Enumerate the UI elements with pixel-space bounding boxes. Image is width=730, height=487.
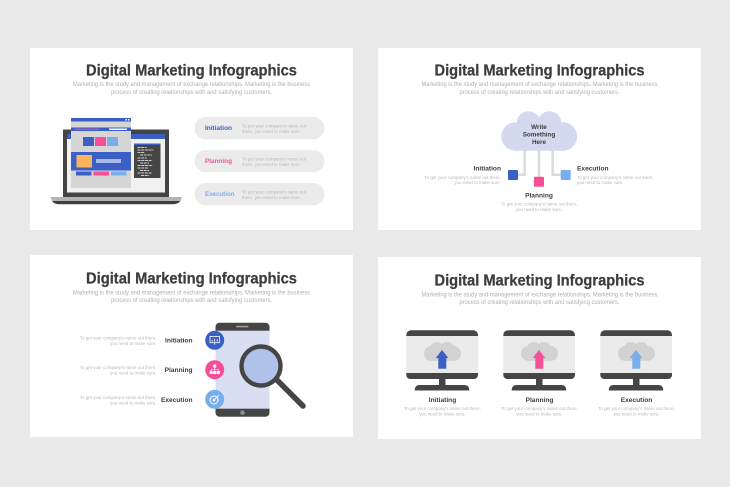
text block: execution row: Execution [161,397,192,404]
label: monitor 3: you need to make sure. [613,412,660,417]
label: monitor 1: Initiating [429,397,456,404]
icon: execution target badge [205,390,224,409]
text block: initiation row [80,335,192,346]
text block: monitors slide intro [422,291,658,306]
text block: execution: you need to make sure. [577,180,623,185]
pill: planning: To get your company's name out [242,156,307,161]
icon: cloud: Here [532,139,546,146]
icon: cloud: Write [531,124,547,131]
pill: initiation: there, you need to make sure. [242,129,301,134]
label: monitor 1: To get your company's name out there, [404,406,481,411]
text block: laptop slide intro: Marketing is the study and management of exchange relationships. Marketing is the business [73,81,310,88]
connector lines [518,150,561,177]
pill: execution: there, you need to make sure. [242,195,301,200]
label: monitor 2: To get your company's name out there, [501,406,578,411]
marker: execution square [561,170,571,180]
text block: execution: Execution [577,166,609,173]
pill: execution: Execution [205,191,234,198]
text block: monitors slide intro: process of creating relationships with and satisfying customers. [460,299,620,306]
text block: planning: you need to make sure. [516,207,562,212]
text block: cloud slide intro: process of creating relationships with and satisfying customers. [460,89,620,96]
panel: cloud slide [378,48,701,230]
heading: phone slide title: Digital Marketing Infographics [86,270,297,287]
text block: planning row: you need to make sure. [110,371,156,376]
text block: laptop slide intro: process of creating relationships with and satisfying customers. [111,89,272,96]
icon: cloud [501,111,577,151]
illustration: phone [216,323,270,417]
text block: planning row [80,365,192,376]
text block: cloud slide intro [422,81,658,96]
text block: laptop slide intro [73,81,310,96]
text block: planning row: Planning [165,367,192,374]
text block: initiation row: To get your company's name out there, [80,335,156,340]
icon: planning hierarchy badge [205,360,224,379]
text block: phone slide intro: Marketing is the study and management of exchange relationships. Marketing is the business [73,289,310,296]
illustration: monitor 1 [406,330,478,390]
pill: initiation: To get your company's name out [242,123,307,128]
heading: monitors slide title: Digital Marketing Infographics [434,272,644,289]
heading: cloud slide title: Digital Marketing Infographics [434,62,644,79]
illustration: monitor 2 [503,330,575,390]
label: monitor 1: you need to make sure. [419,412,466,417]
text block: execution [577,166,654,185]
label: monitor 3: To get your company's name out there, [598,406,675,411]
text block: cloud slide intro: Marketing is the study and management of exchange relationships. Marketing is the business [422,81,658,88]
heading: laptop slide title: Digital Marketing Infographics [86,62,297,79]
label: monitor 2: Planning [526,397,553,404]
pill: initiation [194,117,324,139]
icon: initiation chart badge [205,331,224,350]
text block: initiation: Initiation [474,166,501,173]
label: monitor 1 [404,397,481,417]
pill: execution [194,183,324,205]
pill: initiation: Initiation [205,125,232,132]
panel: laptop slide [30,48,353,230]
text block: planning row: To get your company's name out there, [80,365,156,370]
text block: monitors slide intro: Marketing is the study and management of exchange relationships. Marketing is the business [422,291,658,298]
icon: magnifying glass [242,346,303,406]
illustration: laptop with web pages [50,118,182,204]
illustration: monitor 3 [600,330,672,390]
text block: phone slide intro [73,289,310,304]
pill: planning: there, you need to make sure. [242,162,301,167]
text block: initiation: To get your company's name out there, [424,175,501,180]
text block: execution row: To get your company's name out there, [80,395,156,400]
pill: planning: Planning [205,158,232,165]
text block: initiation: you need to make sure. [455,180,501,185]
panel: phone slide [30,255,353,437]
icon: cloud: Something [523,132,555,138]
text block: execution: To get your company's name out there, [577,175,654,180]
text block: planning [501,192,577,212]
text block: initiation [424,166,501,185]
label: monitor 3: Execution [621,397,652,404]
text block: phone slide intro: process of creating relationships with and satisfying customers. [111,297,272,304]
text block: execution row [80,395,192,405]
text block: execution row: you need to make sure. [110,400,156,405]
panel: monitors slide [378,257,701,439]
label: monitor 2 [501,397,578,417]
text block: planning: To get your company's name out there, [501,202,577,206]
text block: initiation row: Initiation [165,338,192,344]
marker: initiation square [508,170,518,180]
pill: planning [194,150,324,172]
label: monitor 2: you need to make sure. [516,412,563,417]
marker: planning square [534,177,544,187]
text block: planning: Planning [525,192,553,200]
label: monitor 3 [598,397,675,417]
pill: execution: To get your company's name out [242,189,307,194]
text block: initiation row: you need to make sure. [110,341,156,346]
